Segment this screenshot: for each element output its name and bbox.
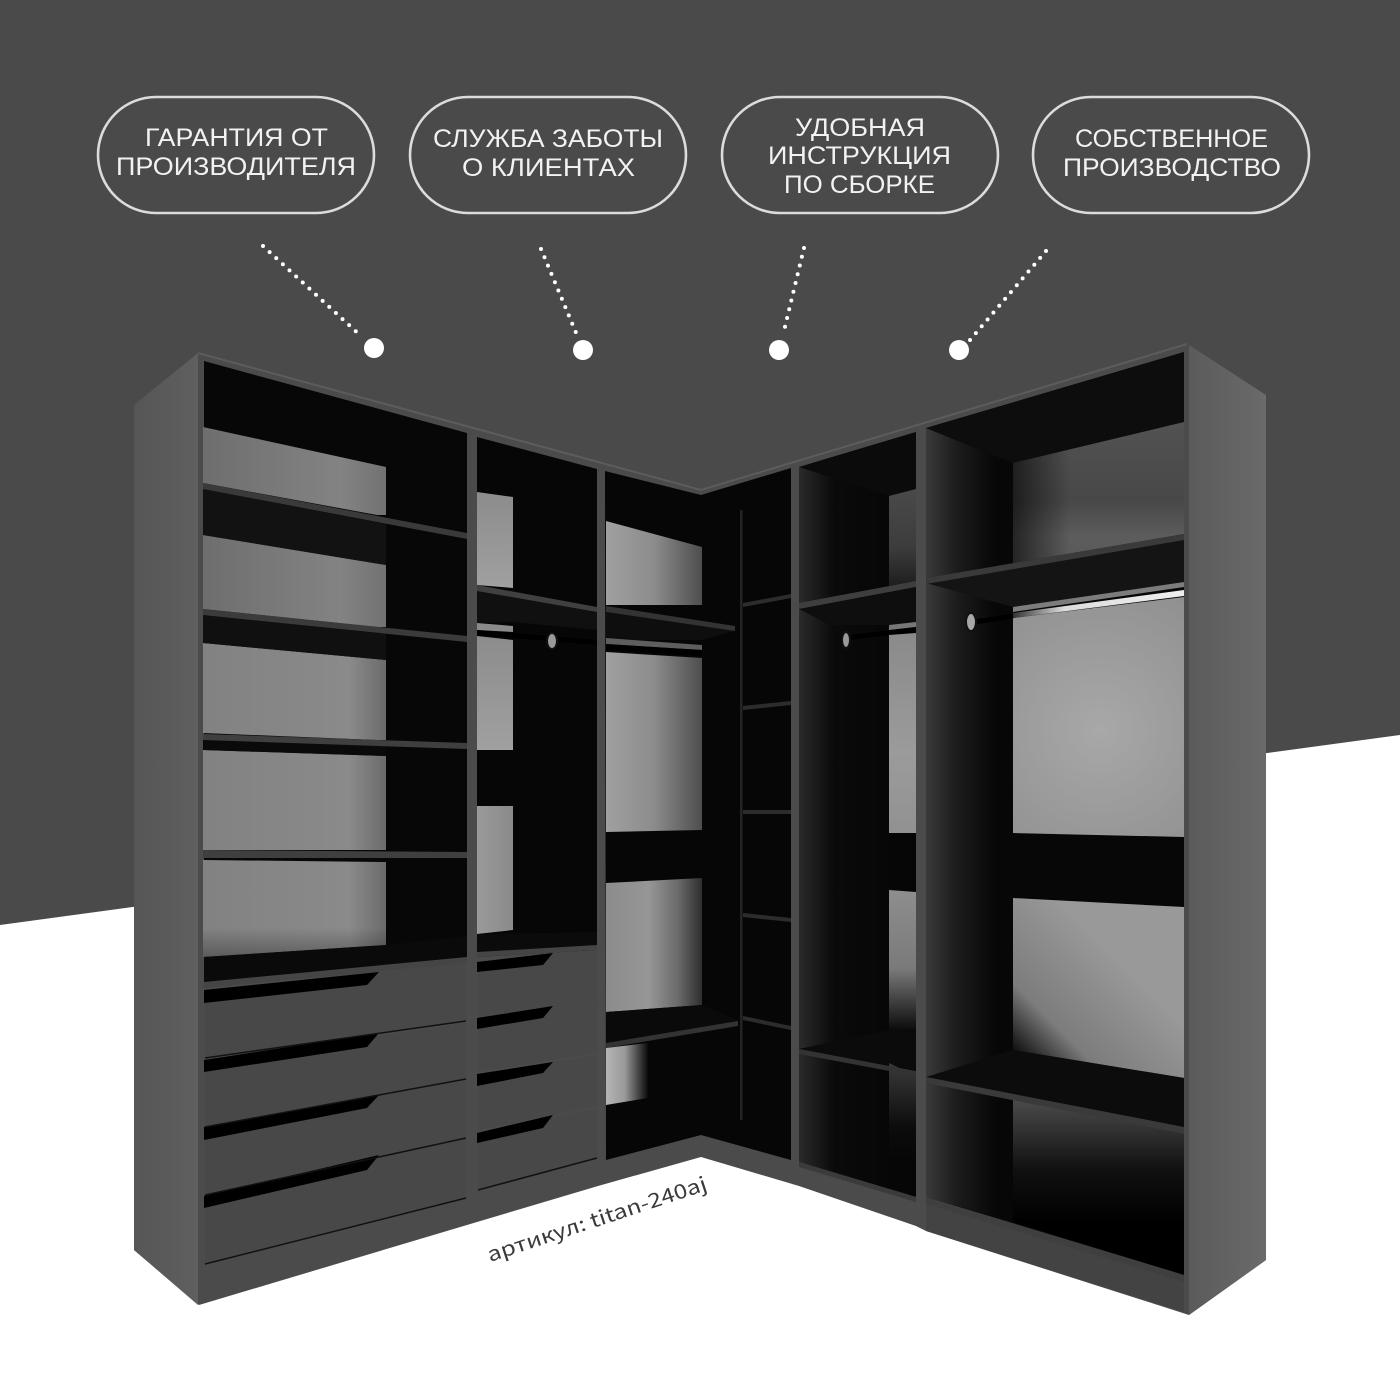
background: white floor wedge xyxy=(0,735,1400,1400)
feature pill: customer care xyxy=(410,97,686,213)
feature pill: manufacturer warranty xyxy=(98,97,374,213)
unit 2: four drawers xyxy=(477,950,597,1190)
unit 5: clothes rail xyxy=(966,590,1184,631)
feature pill: manufacturer warranty: ПРОИЗВОДИТЕЛЯ xyxy=(116,153,356,181)
feature pill: assembly instructions: ИНСТРУКЦИЯ xyxy=(768,142,951,170)
feature pill: assembly instructions: УДОБНАЯ xyxy=(795,114,925,142)
feature pill: customer care: О КЛИЕНТАХ xyxy=(462,154,635,182)
feature pill: assembly instructions xyxy=(722,97,998,213)
unit 3 and corner tower xyxy=(605,468,791,1160)
dotted pointer 4 xyxy=(949,251,1046,360)
feature pill: own production: ПРОИЗВОДСТВО xyxy=(1063,154,1281,182)
dotted pointer 1 xyxy=(263,246,384,358)
feature pill: own production: СОБСТВЕННОЕ xyxy=(1075,125,1268,153)
feature pill: customer care: СЛУЖБА ЗАБОТЫ xyxy=(433,125,663,153)
left side face xyxy=(134,353,198,1305)
unit 2: rail bracket xyxy=(547,633,557,649)
unit 2: shelves and rail xyxy=(477,437,597,957)
corner wardrobe illustration xyxy=(134,344,1266,1315)
article number label: артикул: titan-240aj xyxy=(483,1168,710,1268)
unit 1: open shelves xyxy=(203,361,467,988)
unit 4: rail bracket xyxy=(842,632,850,648)
dotted pointer 3 xyxy=(769,248,804,360)
unit 4: hanging section xyxy=(799,432,916,1202)
unit 1: four drawers xyxy=(204,963,466,1264)
top edge highlight xyxy=(198,344,1187,490)
wardrobe silhouette and frame xyxy=(134,344,1266,1315)
feature pill: assembly instructions: ПО СБОРКЕ xyxy=(784,171,935,199)
feature pill: manufacturer warranty: ГАРАНТИЯ ОТ xyxy=(145,124,328,152)
right side face xyxy=(1189,345,1266,1315)
feature pill: own production xyxy=(1033,97,1309,213)
dotted pointer 2 xyxy=(541,249,593,360)
unit 5: hanging section xyxy=(926,352,1184,1312)
